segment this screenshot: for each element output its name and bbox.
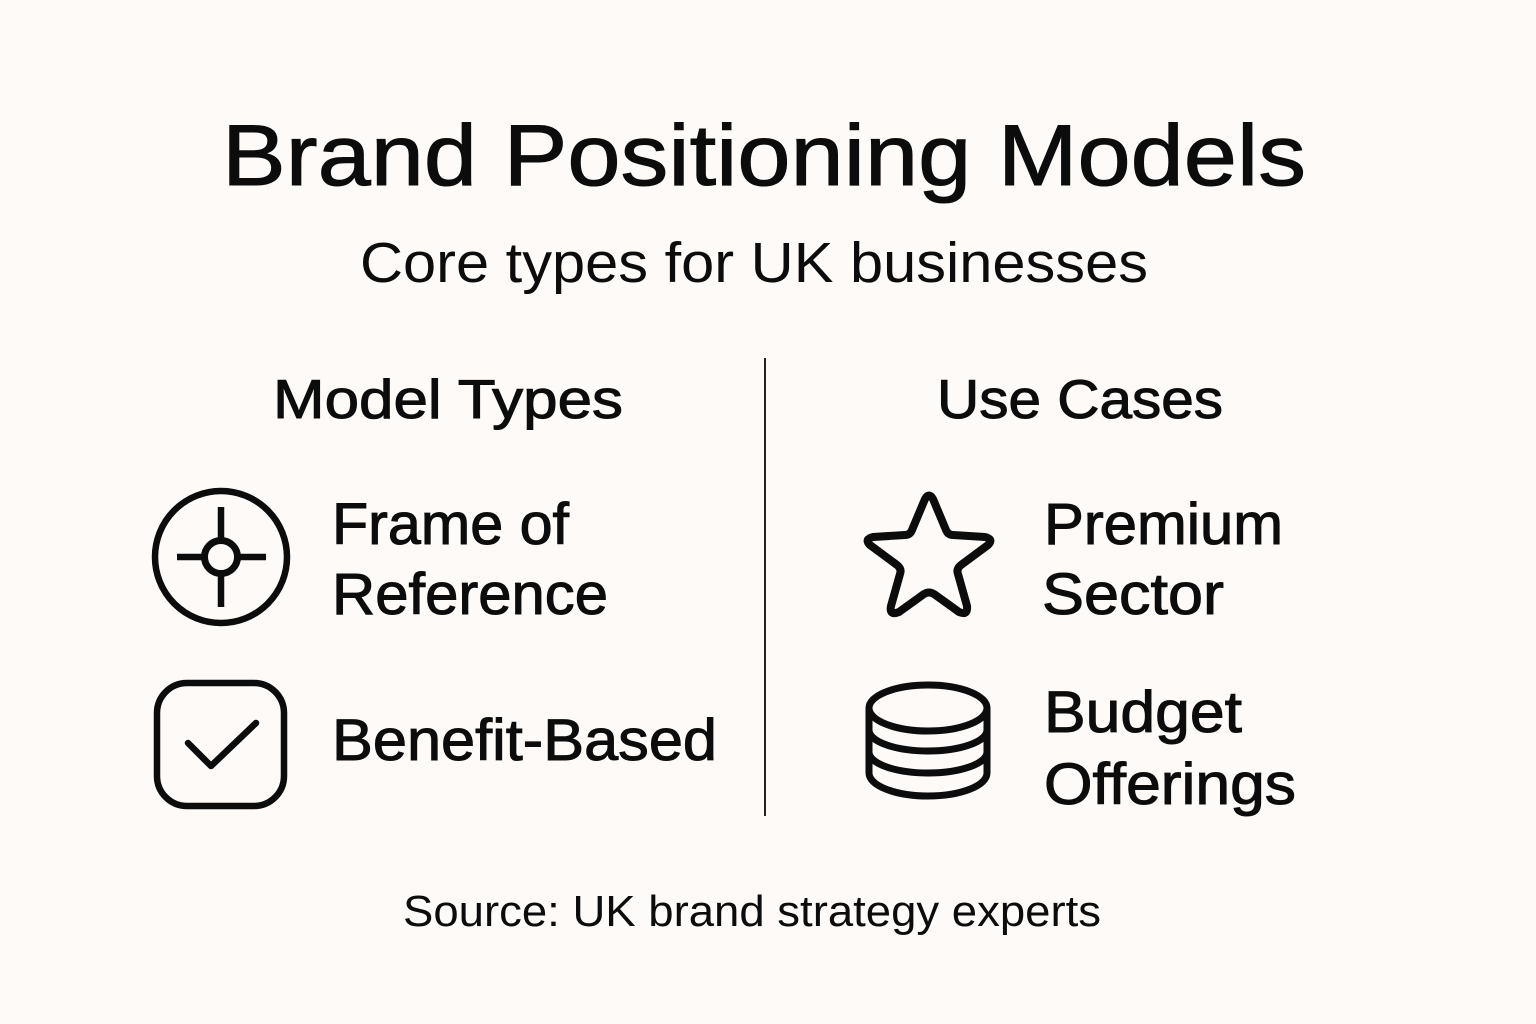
- label: frame of reference: Reference: [332, 562, 608, 627]
- icon: stacked coins: [869, 685, 987, 796]
- panel: model types: [155, 368, 717, 806]
- icon: star: [868, 496, 990, 613]
- label: premium sector: Premium: [1044, 492, 1283, 557]
- label: premium sector: Sector: [1042, 562, 1224, 627]
- heading: use cases: Use Cases: [937, 368, 1223, 430]
- panel: use cases: [868, 368, 1296, 817]
- icon: target crosshair: [155, 491, 287, 623]
- source note: Source: UK brand strategy experts: [403, 887, 1101, 936]
- label: budget offerings: Budget: [1044, 680, 1242, 745]
- icon: checkbox: [157, 683, 284, 806]
- column divider: [764, 358, 766, 816]
- title: Brand Positioning Models: [222, 108, 1306, 204]
- heading: model types: Model Types: [273, 368, 623, 430]
- label: frame of reference: Frame of: [332, 492, 570, 557]
- label: benefit-based: Benefit-Based: [332, 708, 717, 773]
- subtitle: Core types for UK businesses: [360, 231, 1148, 295]
- label: budget offerings: Offerings: [1044, 752, 1296, 817]
